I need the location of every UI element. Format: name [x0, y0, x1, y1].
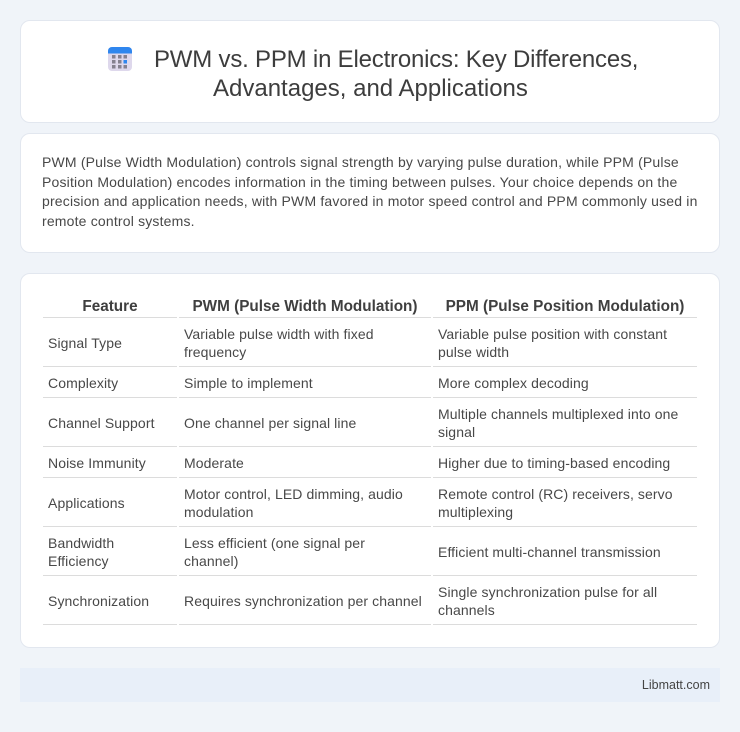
- row: bandwidth efficiency: Efficiency: [48, 552, 109, 568]
- footer bar: [20, 668, 720, 702]
- row: channel support: signal: [438, 424, 475, 440]
- row: signal type: [43, 326, 697, 367]
- intro text: remote control systems.: [42, 213, 195, 229]
- row: noise immunity: Noise Immunity: [48, 454, 146, 470]
- row: applications: [43, 486, 697, 527]
- table header: Feature: [82, 298, 138, 315]
- intro text: PWM (Pulse Width Modulation) controls signal strength by varying pulse duration, while PPM (Pulse: [42, 154, 679, 170]
- intro text: [42, 154, 698, 229]
- row: bandwidth efficiency: Less efficient (one signal per: [184, 534, 365, 550]
- row: noise immunity: Higher due to timing-based encoding: [438, 454, 670, 470]
- row: noise immunity: Moderate: [184, 454, 244, 470]
- row: applications: Remote control (RC) receivers, servo: [438, 486, 673, 502]
- row: complexity: [43, 374, 697, 398]
- row: applications: multiplexing: [438, 504, 513, 520]
- row: signal type: Variable pulse position with constant: [438, 326, 667, 342]
- row: signal type: Signal Type: [48, 334, 122, 350]
- row: channel support: Multiple channels multiplexed into one: [438, 406, 678, 422]
- row: complexity: More complex decoding: [438, 374, 589, 390]
- row: signal type: frequency: [184, 344, 246, 360]
- title: Advantages, and Applications: [213, 75, 528, 102]
- title: [154, 46, 638, 102]
- row: complexity: Simple to implement: [184, 374, 313, 390]
- comparison table: [43, 298, 697, 625]
- intro panel: [20, 133, 720, 253]
- row: channel support: [43, 406, 697, 447]
- table header: [43, 298, 697, 625]
- row: bandwidth efficiency: Efficient multi-channel transmission: [438, 544, 661, 560]
- icon: calendar: [108, 47, 132, 71]
- table header: PWM (Pulse Width Modulation): [192, 298, 418, 315]
- row: synchronization: Single synchronization pulse for all: [438, 584, 657, 600]
- row: applications: modulation: [184, 504, 254, 520]
- row: synchronization: [43, 584, 697, 625]
- row: applications: Applications: [48, 494, 125, 510]
- row: bandwidth efficiency: Bandwidth: [48, 534, 114, 550]
- row: complexity: Complexity: [48, 374, 118, 390]
- footer credit: Libmatt.com: [642, 678, 710, 692]
- title: PWM vs. PPM in Electronics: Key Differences,: [154, 46, 638, 73]
- row: synchronization: Synchronization: [48, 592, 149, 608]
- comparison table panel: [20, 273, 720, 648]
- row: synchronization: channels: [438, 602, 495, 618]
- intro text: Position Modulation) encodes information in the timing between pulses. Your choice depends on the: [42, 174, 677, 190]
- row: channel support: Channel Support: [48, 414, 155, 430]
- row: noise immunity: [43, 454, 697, 478]
- intro text: precision and application needs, with PWM favored in motor speed control and PPM commonly used in: [42, 193, 698, 209]
- row: signal type: pulse width: [438, 344, 509, 360]
- table header: PPM (Pulse Position Modulation): [446, 298, 684, 315]
- row: bandwidth efficiency: [43, 534, 697, 576]
- row: bandwidth efficiency: channel): [184, 552, 239, 568]
- row: channel support: One channel per signal line: [184, 414, 356, 430]
- header panel: [20, 20, 720, 123]
- row: applications: Motor control, LED dimming, audio: [184, 486, 403, 502]
- row: synchronization: Requires synchronization per channel: [184, 592, 422, 608]
- row: signal type: Variable pulse width with fixed: [184, 326, 374, 342]
